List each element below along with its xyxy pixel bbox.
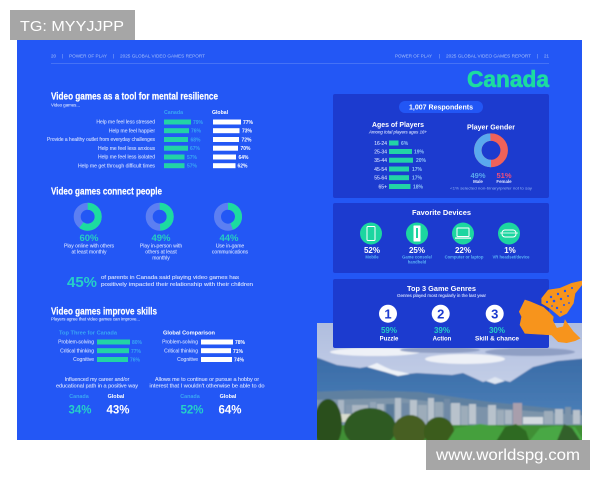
bar chart: Global: 70% — [240, 146, 251, 152]
stats: hobby Canada vs Global: Canada — [180, 394, 201, 400]
captions: device names: handheld — [408, 260, 427, 264]
genre 2: action: Action — [433, 336, 452, 342]
stats: career Canada vs Global: Canada — [69, 394, 90, 400]
caption: in-person — [140, 244, 182, 262]
stat: male — [470, 171, 486, 184]
bar chart: ages: 20% — [416, 158, 427, 164]
caption: communications: Use in-game — [216, 244, 244, 250]
bar chart: ages: 25-34 — [374, 149, 387, 155]
bar chart: skills Global: Cognitive — [177, 357, 198, 363]
subheading: players agree: Players agree that video games can improve... — [51, 316, 140, 322]
bar chart: Global: 64% — [238, 155, 249, 161]
stats: career Canada vs Global: 43% — [106, 404, 130, 416]
captions: device names: Game console/ — [402, 254, 433, 260]
heading: connect people: Video games connect people — [51, 186, 162, 198]
label: top three for Canada: Top Three for Canada — [59, 330, 118, 336]
text: hobby interest: Allows me to continue or pursue a hobby or — [155, 377, 259, 383]
bar chart: Canada: 68% — [190, 137, 201, 143]
text: career influence: Influenced my career and/or — [65, 377, 130, 383]
icon: VR headset — [498, 222, 520, 244]
bar chart: ages: 19% — [414, 149, 425, 155]
pill: 1,007 respondents: 1,007 Respondents — [409, 104, 473, 112]
genre 1: puzzle: 59% — [381, 326, 397, 335]
row labels — [47, 120, 155, 169]
bar chart: Canada: 76% — [191, 128, 202, 134]
genre 1: puzzle: 1 — [384, 306, 392, 322]
header: left page: | — [113, 54, 114, 58]
bar chart: ages: 17% — [412, 176, 423, 182]
bar chart: Canada — [164, 120, 204, 170]
subheading: ages: Among total players ages 16+ — [368, 130, 427, 134]
stats: hobby Canada vs Global: 64% — [218, 404, 242, 416]
caption: in-person: others at least — [145, 250, 177, 256]
genre 1: puzzle: Puzzle — [380, 336, 399, 342]
watermark: TG: TG: MYYJJPP — [20, 18, 124, 35]
caption: communications — [212, 244, 249, 256]
genre 2: action: 39% — [434, 326, 450, 335]
captions: device names: VR headset/device — [492, 254, 530, 260]
caption: online: Play online with others — [64, 244, 115, 250]
panel: top 3 game genres — [333, 279, 549, 348]
heading: favorite devices: Favorite Devices — [412, 210, 471, 217]
stats: career Canada vs Global — [68, 394, 130, 416]
bar chart: skills Canada: Cognitive — [73, 357, 94, 363]
bar chart: ages: 17% — [412, 167, 423, 173]
header: right page: 2025 GLOBAL VIDEO GAMES REPORT — [446, 54, 531, 58]
bar chart: skills Global: Problem-solving — [162, 340, 198, 346]
photo: Vancouver skyline — [317, 323, 582, 440]
caption: in-person: monthly — [152, 256, 170, 262]
heading: player gender: Player Gender — [467, 124, 515, 132]
bar chart: skills Global: Critical thinking — [164, 348, 198, 354]
bar chart: skills Canada: Critical thinking — [60, 348, 94, 354]
heading: mental resilience: Video games as a tool for mental resilience — [51, 92, 218, 102]
bar chart: skills Canada — [58, 340, 143, 364]
row labels: Help me feel less anxious — [98, 146, 155, 152]
map: Canada — [519, 281, 582, 343]
row labels: Help me get through difficult times — [78, 163, 155, 169]
bar chart: skills Canada: 77% — [131, 349, 142, 355]
captions: device names: Computer or laptop — [445, 254, 484, 260]
footnote: gender: <1% selected non-binary/prefer not to say — [450, 186, 532, 190]
bar chart: ages: 16-24 — [374, 141, 387, 147]
icon: game console — [406, 222, 428, 244]
genre 1: puzzle — [379, 305, 399, 342]
genre 3: skill and chance: 30% — [489, 326, 505, 335]
bar chart: Global — [213, 120, 254, 170]
donut: 44% communications — [218, 206, 238, 227]
donut: 60% online — [77, 206, 98, 227]
donut: gender split — [478, 137, 504, 164]
label: global comparison: Global Comparison — [163, 330, 216, 336]
stat: male: 49% — [470, 171, 486, 180]
bar chart: Canada: 67% — [190, 146, 201, 152]
genre 3: skill and chance: 3 — [491, 306, 498, 322]
bar chart: skills Global: 74% — [234, 358, 245, 364]
bar chart: Canada: 57% — [187, 164, 198, 170]
header: left page: 20 — [51, 54, 57, 58]
genre 3: skill and chance: Skill & chance — [475, 336, 520, 342]
stats: hobby Canada vs Global: 52% — [180, 404, 204, 416]
header: left page: | — [62, 54, 63, 58]
header: right page: | — [439, 54, 440, 58]
column label: Global: Global — [212, 110, 229, 116]
heading: ages of players: Ages of Players — [372, 122, 424, 129]
panel: favorite devices — [333, 203, 549, 273]
genre 2: action: 2 — [437, 306, 444, 322]
bar chart: skills Canada: 80% — [132, 340, 143, 346]
stats: hobby Canada vs Global: Global — [220, 394, 237, 400]
icon: mobile — [360, 222, 382, 244]
bar chart: ages: 45-54 — [374, 167, 387, 173]
genre 2: action — [432, 305, 452, 342]
stat: 60%: 60% — [79, 233, 99, 244]
icon: laptop — [452, 222, 474, 244]
header: left page: 2025 GLOBAL VIDEO GAMES REPORT — [120, 54, 205, 58]
text: career influence: educational path in a positive way — [56, 384, 138, 390]
genre 3: skill and chance — [475, 305, 520, 342]
header: right page — [395, 54, 550, 58]
stats: device percentages — [364, 246, 516, 255]
section: mental resilience — [47, 92, 254, 170]
stat: 49%: 49% — [151, 233, 171, 244]
bar chart: Global: 72% — [242, 137, 252, 143]
watermark: website — [426, 440, 590, 470]
stats: device percentages: 1% — [504, 246, 516, 255]
row labels: Provide a healthy outlet from everyday challenges — [47, 137, 155, 143]
header: left page: POWER OF PLAY — [69, 54, 107, 58]
text: parents statement: positively impacted their relationship with their children — [101, 282, 253, 288]
bar chart: skills Global: 78% — [235, 340, 246, 346]
row labels: Help me feel less stressed — [96, 120, 155, 126]
stat: 44%: 44% — [219, 233, 239, 244]
bar chart: Global: 62% — [238, 164, 248, 170]
stat: 45% parents: 45% — [67, 275, 97, 291]
caption: in-person: Play in-person with — [140, 244, 182, 250]
text: parents statement — [101, 275, 253, 288]
bar chart: ages: 35-44 — [374, 158, 387, 164]
caption: online — [64, 244, 115, 256]
column label: Canada: Canada — [164, 110, 183, 116]
header: right page: POWER OF PLAY — [395, 54, 432, 58]
captions: device names — [365, 254, 530, 264]
heading: improve skills: Video games improve skills — [51, 306, 157, 318]
stats: device percentages: 22% — [455, 246, 471, 255]
bar chart: Canada: 79% — [193, 120, 204, 126]
stats: device percentages: 25% — [409, 246, 425, 255]
row labels: Help me feel less isolated — [98, 155, 155, 161]
header: left page — [51, 54, 205, 58]
subheading: genres: Genres played most regularly in the last year — [397, 293, 487, 298]
stat: female: 51% — [496, 171, 512, 180]
infographic content — [47, 54, 582, 416]
stat: female — [496, 171, 512, 184]
heading: top 3 genres: Top 3 Game Genres — [407, 286, 476, 293]
bar chart: ages: 6% — [401, 141, 409, 147]
bar chart: Canada: 57% — [187, 155, 198, 161]
stats: career Canada vs Global: Global — [108, 394, 125, 400]
stat: male: Male — [473, 179, 483, 184]
bar chart: Global: 73% — [242, 128, 253, 134]
text: hobby interest: interest that I wouldn't otherwise be able to do — [150, 384, 265, 390]
bar chart: ages: 18% — [413, 184, 424, 190]
bar chart: skills Global: 71% — [233, 349, 244, 355]
pill: 1,007 respondents — [399, 101, 483, 113]
text: career influence — [56, 377, 138, 390]
stats: device percentages: 52% — [364, 246, 380, 255]
bar chart: Global: 77% — [243, 120, 254, 126]
section: improve skills — [51, 306, 265, 416]
stats: hobby Canada vs Global — [180, 394, 242, 416]
caption: communications: communications — [212, 250, 249, 256]
bar chart: skills Canada: Problem-solving — [58, 340, 94, 346]
bar chart: ages — [374, 140, 427, 190]
donut: 49% in-person — [149, 206, 170, 227]
bar chart: ages: 65+ — [379, 184, 387, 190]
watermark: website: www.worldspg.com — [435, 447, 580, 464]
panel: respondents, ages and gender — [333, 94, 549, 198]
captions: device names: Mobile — [365, 254, 379, 260]
bar chart: skills Global — [162, 340, 246, 364]
text: parents statement: of parents in Canada said playing video games has — [101, 275, 239, 281]
stats: career Canada vs Global: 34% — [68, 404, 92, 416]
subheading: video games: Video games... — [51, 102, 80, 108]
text: hobby interest — [150, 377, 265, 390]
title: Canada: Canada — [467, 66, 550, 92]
header: right page: | — [537, 54, 538, 58]
caption: online: at least monthly — [71, 250, 107, 256]
header: right page: 21 — [544, 54, 550, 58]
bar chart: ages: 55-64 — [374, 176, 387, 182]
bar chart: skills Canada: 76% — [130, 358, 141, 364]
section: connect people — [51, 186, 253, 291]
page background — [17, 40, 582, 440]
watermark: TG — [10, 10, 135, 40]
row labels: Help me feel happier — [109, 128, 155, 134]
stat: female: Female — [496, 179, 512, 184]
